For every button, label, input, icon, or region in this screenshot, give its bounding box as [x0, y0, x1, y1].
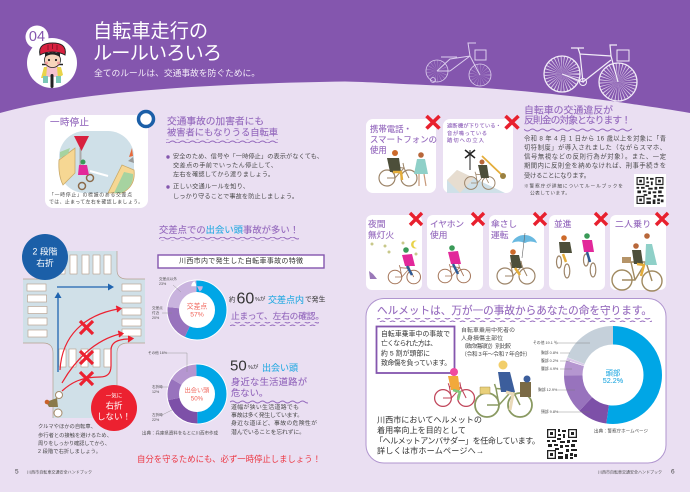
- caption: intersection: クルマやほかの自転車、: [38, 422, 96, 430]
- stat: 60 percent: で発生: [305, 294, 326, 304]
- chart labels: intersections: [152, 276, 181, 320]
- header band: [0, 0, 690, 113]
- title: ルールいろいろ: [93, 44, 222, 64]
- footer left: 5: [15, 468, 19, 476]
- note: rule book: ※警察庁が詳細についてルールブックを: [524, 182, 623, 190]
- text: narrow roads: 潜んでいることを忘れずに。: [231, 428, 305, 436]
- donut chart: injury sites: 52.2%: [603, 376, 624, 385]
- panel: night riding: [366, 215, 422, 290]
- panel: railway crossing: 踏切への立入: [447, 136, 485, 144]
- box: head injury: 約 5 割が頭部に: [381, 348, 430, 358]
- text: violation details: [524, 134, 667, 180]
- chart labels: head-on: 左折時: [152, 412, 163, 417]
- chart labels: head-on: 22%: [152, 418, 160, 422]
- caption: intersection: 歩行者との接触を避けるため、: [38, 431, 112, 439]
- slogan: 自分を守るためにも、必ず一時停止しましょう！: [137, 454, 321, 464]
- bullet list: 正しい交通ルールを知り、: [173, 182, 249, 190]
- panel: riding side by side: 並進: [554, 218, 572, 229]
- chart labels: injury sites: [533, 340, 590, 414]
- callout: two-stage: 右折: [36, 257, 54, 268]
- illustration: double riding: [612, 233, 662, 291]
- text: helmet ambassador: 着用率向上を目的として: [377, 425, 466, 435]
- chart labels: injury sites: その他 19.1 ％: [533, 340, 558, 345]
- icon: cross: [472, 213, 484, 225]
- chart labels: head-on: 右折時: [152, 384, 163, 389]
- footer right: 川西市自転車交通安全ハンドブック: [598, 468, 662, 474]
- box: head injury: 亡くなられた方は、: [381, 338, 437, 348]
- arrows: direct right turn red: [60, 306, 133, 391]
- heading: cyclists can be offenders: 交通事故の加害者にも: [167, 114, 264, 128]
- stat: 60 percent: 約: [229, 294, 236, 304]
- footer right: 6: [671, 468, 675, 476]
- chart labels: injury sites: 頸部 9.8%: [541, 409, 559, 414]
- chart labels: injury sites: 胸部 0.8%: [541, 350, 559, 355]
- bullet list: しっかり守ることで事故を防止しましょう。: [173, 192, 298, 200]
- panel: mobile phone: 携帯電話・: [370, 124, 412, 134]
- illustration: earphone cyclist: [438, 245, 470, 283]
- stat: 50 percent: 身近な生活道路が: [231, 376, 308, 387]
- heading: violations: [524, 104, 632, 132]
- bullet list: 安全のため、信号や「一時停止」の表示がなくても、: [173, 152, 323, 160]
- panel: night riding: 無灯火: [368, 229, 394, 240]
- text: helmet ambassador: [375, 414, 540, 456]
- note: rule book: [524, 182, 623, 196]
- illustration: girl on bicycle: [435, 368, 474, 406]
- source: left: 出典：兵庫県資料をもとに川西市作成: [142, 430, 219, 436]
- chart labels: injury sites: 腹部 0.2%: [541, 358, 559, 363]
- panel: railway crossing: 遮断機が下りている・: [447, 122, 501, 130]
- text: narrow roads: [231, 403, 317, 436]
- icon: cross: [506, 116, 518, 128]
- illustration: mother and child on bicycle: [475, 360, 532, 417]
- QR code: city website: [547, 429, 577, 459]
- illustration: night cyclist: [369, 240, 420, 284]
- heading: helmet: [377, 304, 652, 322]
- callout: do not turn at once: 右折: [105, 400, 123, 410]
- panel: mobile phone: スマートフォンの: [370, 134, 437, 144]
- panel: riding side by side: [549, 215, 605, 290]
- footer right: [598, 468, 675, 476]
- caption: intersection: 2 段階で右折しましょう。: [38, 447, 101, 455]
- panel: night riding: 夜間: [368, 219, 385, 229]
- box: head injury: 自転車乗車中の事故で: [381, 329, 450, 338]
- text: helmet ambassador: 川西市においてヘルメットの: [377, 414, 482, 424]
- chart labels: intersections: 23%: [159, 282, 167, 286]
- heading: violations: 自転車の交通違反が: [524, 104, 613, 116]
- text: narrow roads: 事故は多く発生しています。: [231, 411, 303, 419]
- subtitle: 全てのルールは、交通事故を防ぐために。: [94, 67, 260, 78]
- illustration: stop intersection: [59, 131, 134, 193]
- stat: 60 percent: %が: [255, 295, 266, 303]
- panel: umbrella: [489, 215, 544, 290]
- caption: intersection: [38, 422, 112, 455]
- chart labels: intersections: 20%: [152, 316, 160, 320]
- caption: stop: [49, 192, 143, 206]
- donut chart: head-on: 50%: [191, 396, 204, 402]
- text: violation details: 令和 8 年 4 月 1 日から 16 歳以上を対象に「青: [524, 134, 666, 142]
- footer left: [15, 468, 92, 476]
- chart title: （致命傷部位）別比較: [461, 342, 511, 350]
- icon: cross: [410, 213, 422, 225]
- text: narrow roads: 身近な道ほど、事故の危険性が: [231, 419, 317, 427]
- callout: do not turn at once: しない！: [97, 412, 131, 422]
- panel: stop sign: [45, 112, 154, 208]
- heading: head-on accidents: 交差点での出会い頭事故が多い！: [159, 224, 299, 235]
- stat: 60 percent: 60: [236, 290, 254, 308]
- donut chart: injury sites: 頭部: [606, 368, 620, 378]
- panel: earphones: 使用: [430, 229, 447, 240]
- panel: mobile phone: [366, 119, 437, 193]
- stat: 50 percent: [230, 358, 308, 404]
- illustration: phone cyclist: [379, 150, 428, 186]
- chart labels: head-on: [148, 350, 187, 422]
- stat: 50 percent: 危ない。: [231, 387, 268, 398]
- panel: railway crossing: 音が鳴っている: [447, 129, 487, 137]
- chart labels: intersections: 交差点以外: [159, 276, 177, 281]
- panel: double riding: 二人乗り: [615, 218, 651, 229]
- panel: helmet: [366, 298, 666, 463]
- chart title: 自転車乗用中死者の: [461, 326, 515, 334]
- box: characteristics: [158, 255, 324, 268]
- stat: 50 percent: 50: [230, 358, 247, 374]
- box: head injury: 致命傷を負っています。: [381, 358, 451, 367]
- text: helmet ambassador: 「ヘルメットアンバサダー」を任命しています。: [375, 436, 540, 446]
- heading: violations: 反則金の対象となります！: [524, 114, 631, 126]
- section badge with mascot: [26, 26, 77, 88]
- icon: cross: [656, 213, 668, 225]
- donut chart: intersections: 交差点: [187, 302, 207, 310]
- callout: do not turn at once: 一気に: [106, 392, 122, 400]
- heading: helmet: ヘルメットは、万が一の事故からあなたの命を守ります。: [377, 304, 652, 317]
- bullet list: 交差点の手前でいったん停止して、: [173, 162, 277, 170]
- illustration: railway crossing: [447, 150, 506, 193]
- chart labels: intersections: 付近: [152, 310, 160, 315]
- panel: double riding: [610, 215, 666, 291]
- caption: stop: 「一時停止」の標識のある交差点: [49, 192, 132, 198]
- donut chart: injury sites: [533, 335, 653, 415]
- text: narrow roads: 道幅が狭い生活道路でも: [231, 403, 299, 411]
- callout: two-stage: 2 段階: [33, 246, 58, 256]
- panel: earphones: イヤホン: [430, 219, 464, 229]
- icon: cyclist: [45, 392, 62, 417]
- chart title: [461, 326, 531, 358]
- box: head injury: [376, 326, 454, 373]
- text: violation details: 信号無視などの反則行為が対象）。また、一定: [524, 152, 667, 160]
- icon: red crosses: [80, 321, 93, 385]
- text: violation details: 期間内に反則金を納めなければ、刑事手続きを: [524, 160, 666, 170]
- illustration: umbrella cyclist: [497, 233, 537, 284]
- caption: stop: では、止まって左右を確認しましょう。: [49, 198, 143, 206]
- bullet list: [166, 152, 323, 200]
- icon: small bicycle outline: [426, 43, 491, 86]
- stat: 60 percent: 交差点内: [268, 294, 304, 305]
- text: violation details: 切符制度」が導入されました（ながらスマホ、: [524, 142, 666, 152]
- stat: 60 percent: [229, 290, 326, 326]
- donut chart: head-on: [148, 350, 228, 424]
- panel: railway crossing: [443, 119, 513, 193]
- chart labels: injury sites: 腰部 4.9%: [541, 366, 559, 371]
- footer left: 川西市自転車交通安全ハンドブック: [27, 468, 92, 474]
- panel: mobile phone: 使用: [370, 145, 387, 155]
- icon: cross: [534, 213, 546, 225]
- donut chart: intersections: [152, 276, 228, 340]
- stat: 50 percent: 出会い頭: [262, 362, 298, 373]
- panel: earphones: [427, 215, 483, 290]
- heading: head-on accidents: [159, 224, 299, 241]
- diagram: intersection: [22, 234, 145, 431]
- heading: stop: 一時停止: [50, 116, 89, 128]
- QR code: rule book: [634, 174, 666, 207]
- section badge with mascot: 04: [29, 29, 45, 45]
- arrow: two-stage blue: [54, 284, 114, 372]
- chart labels: head-on: その他 16%: [148, 350, 168, 355]
- panel: umbrella: 運転: [491, 230, 509, 240]
- donut chart: intersections: 57%: [190, 312, 204, 318]
- panel: umbrella: 傘さし: [491, 219, 517, 229]
- stat: 50 percent: %が: [248, 363, 259, 371]
- note: rule book: 公表しています。: [530, 190, 570, 196]
- callout: two-stage: [22, 234, 68, 280]
- bullet list: 左右を確認してから渡りましょう。: [173, 170, 274, 178]
- donut chart: head-on: 出会い頭: [185, 386, 210, 394]
- illustration: side by side: [556, 233, 596, 278]
- text: violation details: 受けることになります。: [524, 170, 590, 180]
- stat: 60 percent: 止まって、左右の確認。: [231, 310, 324, 321]
- chart title: 人身損傷主部位: [461, 334, 503, 342]
- icon: cross: [426, 116, 440, 128]
- title: 自転車走行の: [93, 20, 208, 42]
- chart labels: intersections: 交差点: [152, 305, 163, 310]
- chart labels: injury sites: 胸部 12.9%: [538, 387, 558, 392]
- icon: blue circle mark: [138, 112, 154, 126]
- icon: cross: [595, 213, 607, 225]
- chart labels: head-on: 12%: [152, 390, 160, 394]
- box: characteristics: 川西市内で発生した自転車事故の特徴: [179, 256, 303, 265]
- caption: intersection: 周りをしっかり確認してから、: [38, 439, 110, 447]
- callout: do not turn at once: [91, 385, 137, 431]
- text: helmet ambassador: 詳しくは市ホームページへ→: [377, 446, 484, 456]
- source: right: 出典：警察庁ホームページ: [594, 428, 648, 434]
- heading: cyclists can be offenders: [166, 114, 278, 143]
- chart title: （令和 3 年〜令和 7 年合計）: [461, 350, 531, 358]
- title: [93, 20, 222, 64]
- heading: cyclists can be offenders: 被害者にもなりうる自転車: [167, 126, 278, 138]
- icon: large bicycle outline: [544, 45, 637, 101]
